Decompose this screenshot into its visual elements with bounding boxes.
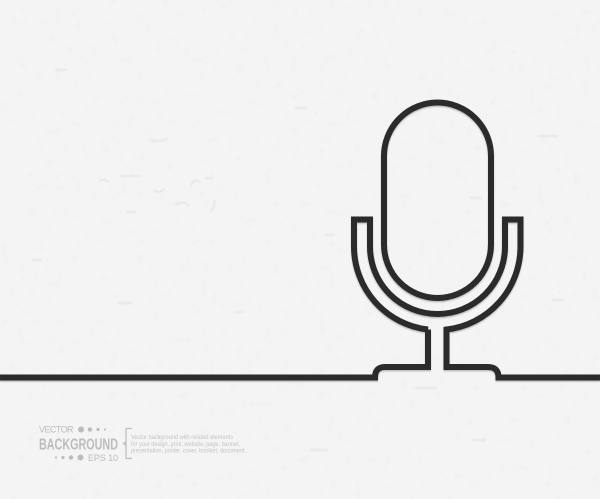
microphone cradle and right baseline — [354, 220, 600, 378]
description text: presentation, poster, cover, booklet, document. — [131, 448, 246, 454]
microphone stand and left baseline — [0, 330, 428, 378]
label: eps 10: EPS 10 — [88, 453, 118, 463]
caption logo block — [39, 424, 246, 463]
label: background: BACKGROUND — [39, 436, 118, 454]
description text: for your design, print, website, page, banner, — [131, 441, 240, 448]
label: vector: VECTOR — [39, 424, 74, 434]
dots: top row — [78, 426, 106, 432]
dots: bottom row — [55, 454, 84, 460]
description text: Vector background with related elements — [131, 434, 233, 441]
microphone line shadow — [0, 104, 600, 379]
description text — [131, 434, 246, 454]
bracket — [124, 428, 132, 458]
microphone capsule — [384, 103, 491, 298]
microphone line icon with baseline — [0, 103, 600, 378]
